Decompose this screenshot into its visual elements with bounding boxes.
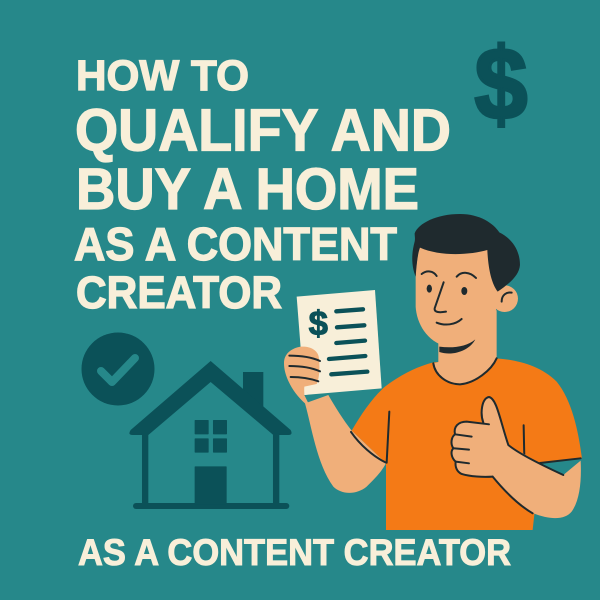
person: ear <box>491 285 518 312</box>
person: thumbs-up arm <box>451 397 581 518</box>
document <box>297 290 382 395</box>
caption: AS A CONTENT CREATOR <box>78 532 511 573</box>
title <box>74 52 451 318</box>
icon: dollar sign: $ <box>474 27 528 141</box>
person: neck <box>433 310 497 384</box>
person: hair <box>412 214 520 292</box>
person: sleeve lines <box>351 412 581 463</box>
person: raised arm <box>305 395 386 493</box>
icon: house <box>129 361 292 509</box>
document: $ <box>309 305 328 343</box>
person: face <box>416 243 500 347</box>
title: CREATOR <box>76 267 282 318</box>
person: shirt <box>352 358 582 530</box>
person: facial features <box>422 271 512 384</box>
title: QUALIFY AND <box>75 98 451 164</box>
person: hand holding document <box>284 347 320 407</box>
title: BUY A HOME <box>76 157 419 222</box>
icon: check badge <box>82 332 154 406</box>
person illustration <box>284 214 582 530</box>
title: HOW TO <box>76 52 249 100</box>
title: AS A CONTENT <box>74 218 397 270</box>
